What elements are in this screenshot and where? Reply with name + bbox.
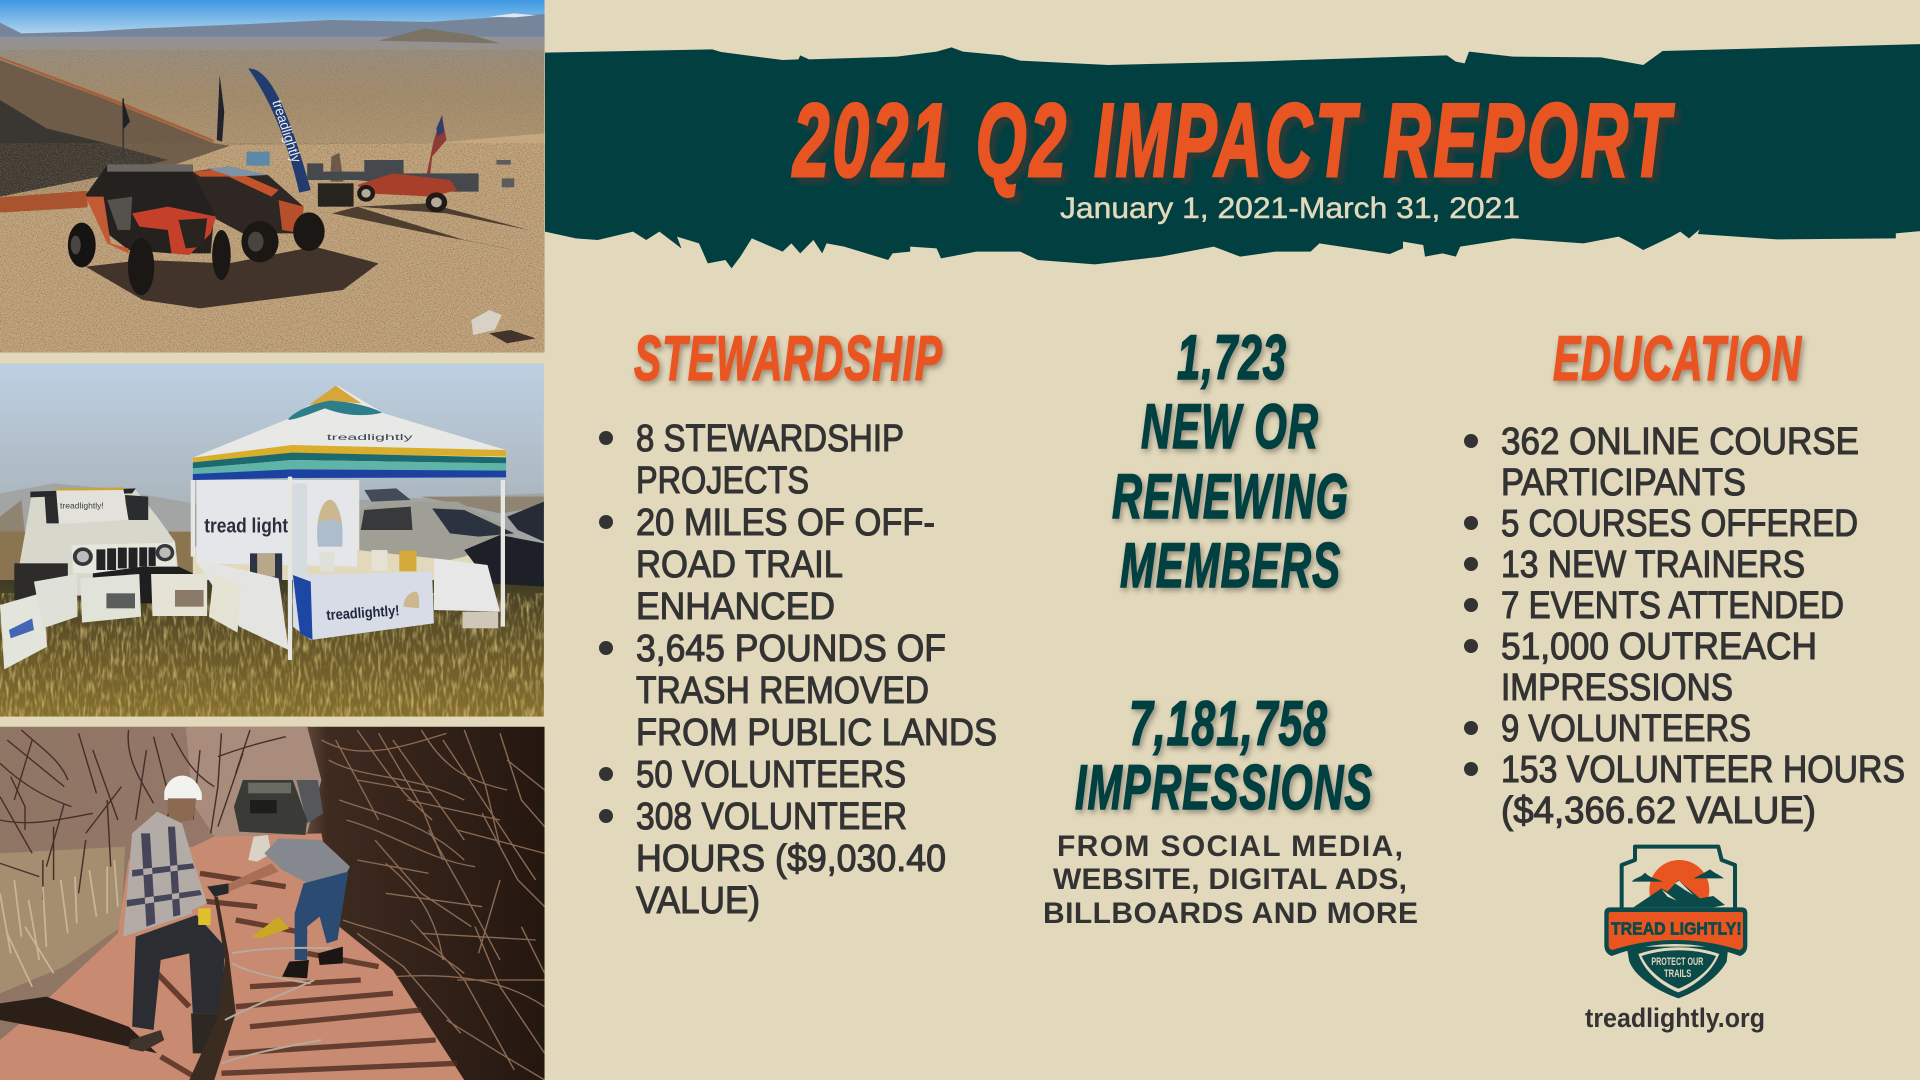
American flag	[427, 115, 446, 173]
website url: treadlightly.org	[1585, 1003, 1765, 1033]
heading: stewardship: STEWARDSHIP	[634, 324, 943, 394]
shadows on the sand	[86, 247, 379, 308]
list: stewardship stats: ROAD TRAIL	[636, 544, 843, 586]
list: education stats: 7 EVENTS ATTENDED	[1501, 585, 1844, 627]
stat: new or renewing members: MEMBERS	[1120, 531, 1341, 601]
logo: Tread Lightly badge: TRAILS	[1664, 968, 1691, 980]
list: education stats: 9 VOLUNTEERS	[1501, 708, 1751, 750]
table: treadlightly!	[326, 603, 400, 624]
photo: Tread Lightly tent and jeep display: tread light	[204, 514, 288, 537]
list: stewardship stats	[599, 418, 997, 922]
stat: impressions	[1043, 689, 1418, 930]
jeep sign	[56, 487, 129, 524]
man in hard hat	[123, 776, 229, 1053]
list: education stats: ($4,366.62 VALUE)	[1501, 790, 1816, 832]
list: stewardship stats: VALUE)	[636, 880, 760, 922]
jeep sign: treadlightly!	[60, 501, 104, 511]
stat: new or renewing members: RENEWING	[1112, 462, 1349, 532]
stat: new or renewing members	[1112, 323, 1349, 601]
display signs	[0, 593, 47, 669]
buggy	[357, 173, 457, 197]
logo: Tread Lightly badge: TREAD LIGHTLY!	[1611, 919, 1742, 939]
table	[293, 550, 434, 640]
list: stewardship stats: 8 STEWARDSHIP	[636, 418, 904, 460]
jeep on trail	[296, 780, 323, 823]
logo: Tread Lightly badge: PROTECT OUR	[1651, 956, 1704, 968]
banner: torn teal header	[545, 44, 1920, 268]
feather banner: treadlightly	[269, 98, 305, 164]
feather banner	[248, 68, 311, 193]
list: stewardship stats: 50 VOLUNTEERS	[636, 754, 906, 796]
table and person	[318, 183, 354, 207]
man in grey shirt	[229, 835, 350, 978]
list: education stats: 13 NEW TRAINERS	[1501, 544, 1805, 586]
chair and low banner	[250, 553, 282, 580]
first UTV	[86, 165, 214, 253]
list: stewardship stats: HOURS ($9,030.40	[636, 838, 946, 880]
orange safety fence	[0, 191, 87, 213]
stat: impressions: 7,181,758	[1129, 689, 1328, 759]
trail	[0, 833, 464, 1080]
caption: impression sources: BILLBOARDS AND MORE	[1043, 897, 1418, 930]
logo: Tread Lightly badge	[1604, 847, 1747, 998]
jeep	[18, 490, 179, 597]
list: stewardship stats: ENHANCED	[636, 586, 835, 628]
flags	[122, 98, 124, 160]
tent back wall	[196, 480, 357, 567]
photo: volunteers clearing brush from a trail	[0, 727, 545, 1080]
van	[357, 502, 514, 560]
stat: impressions: IMPRESSIONS	[1075, 753, 1373, 823]
list: education stats: IMPRESSIONS	[1501, 667, 1733, 709]
panel: stewardship	[599, 324, 997, 922]
list: stewardship stats: 308 VOLUNTEER	[636, 796, 907, 838]
list: education stats: 5 COURSES OFFERED	[1501, 503, 1858, 545]
list: stewardship stats: 3,645 POUNDS OF	[636, 628, 946, 670]
caption: impression sources	[1043, 830, 1418, 930]
caption: impression sources: FROM SOCIAL MEDIA,	[1057, 830, 1403, 863]
list: education stats: PARTICIPANTS	[1501, 462, 1746, 504]
list: education stats: 51,000 OUTREACH	[1501, 626, 1817, 668]
list: education stats: 362 ONLINE COURSE	[1501, 421, 1859, 463]
list: stewardship stats: FROM PUBLIC LANDS	[636, 712, 997, 754]
second UTV	[192, 166, 304, 234]
photo: off-road vehicles in the desert	[0, 0, 545, 353]
subtitle: date range: January 1, 2021-March 31, 2021	[1060, 192, 1520, 225]
tent roof	[193, 386, 506, 463]
tent valance stripes	[193, 445, 506, 462]
tent poles	[193, 477, 503, 660]
stat: new or renewing members: NEW OR	[1141, 392, 1319, 462]
bare branches	[0, 730, 286, 900]
panel: education	[1464, 324, 1905, 832]
stat: new or renewing members: 1,723	[1177, 323, 1287, 393]
photo: Tread Lightly tent and jeep display	[0, 363, 544, 717]
dry grass	[0, 847, 125, 993]
list: stewardship stats: 20 MILES OF OFF-	[636, 502, 935, 544]
caption: impression sources: WEBSITE, DIGITAL ADS,	[1053, 863, 1407, 896]
list: stewardship stats: PROJECTS	[636, 460, 809, 502]
list: education stats	[1464, 421, 1905, 832]
distant vehicles	[307, 160, 479, 192]
photo: Tread Lightly tent and jeep display: treadlightly	[327, 432, 414, 442]
felled branch	[189, 897, 236, 1080]
list: stewardship stats: TRASH REMOVED	[636, 670, 929, 712]
